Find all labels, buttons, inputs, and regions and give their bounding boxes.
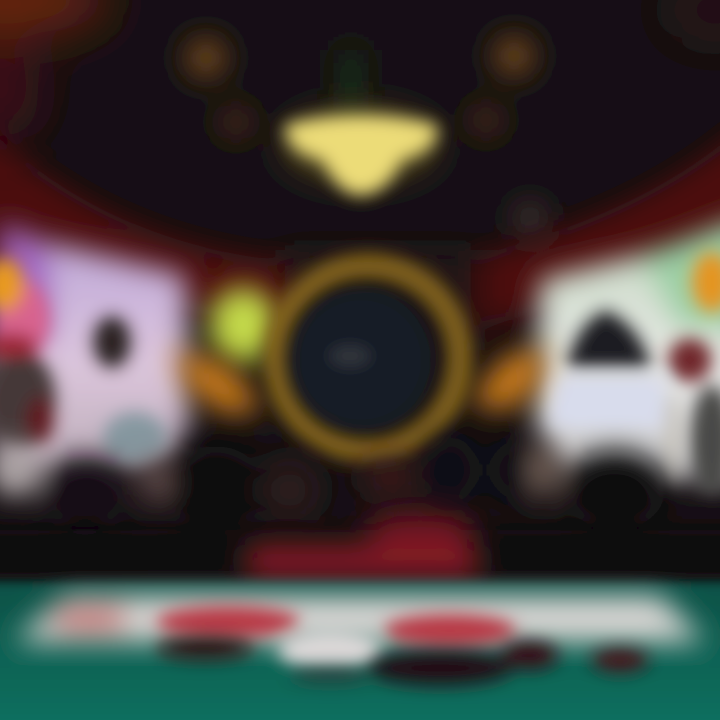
black band above table [0, 530, 720, 578]
chandelier [282, 107, 438, 195]
white cards on the table [15, 596, 705, 642]
dark chips on the table [157, 637, 648, 685]
central red chips [245, 512, 480, 577]
ceiling lights [186, 36, 547, 235]
green felt table [0, 582, 720, 720]
row of dark poker chips [0, 436, 665, 534]
right wall panel [535, 215, 720, 480]
ceiling: dark red curved band [0, 110, 720, 350]
top-left warm corner [0, 0, 720, 140]
green-yellow blob [209, 287, 277, 363]
orange wings [172, 348, 548, 416]
central gold ring [274, 264, 462, 452]
red chips on the table [156, 606, 516, 670]
left wall panel [0, 222, 190, 480]
dark central disc [291, 290, 431, 430]
